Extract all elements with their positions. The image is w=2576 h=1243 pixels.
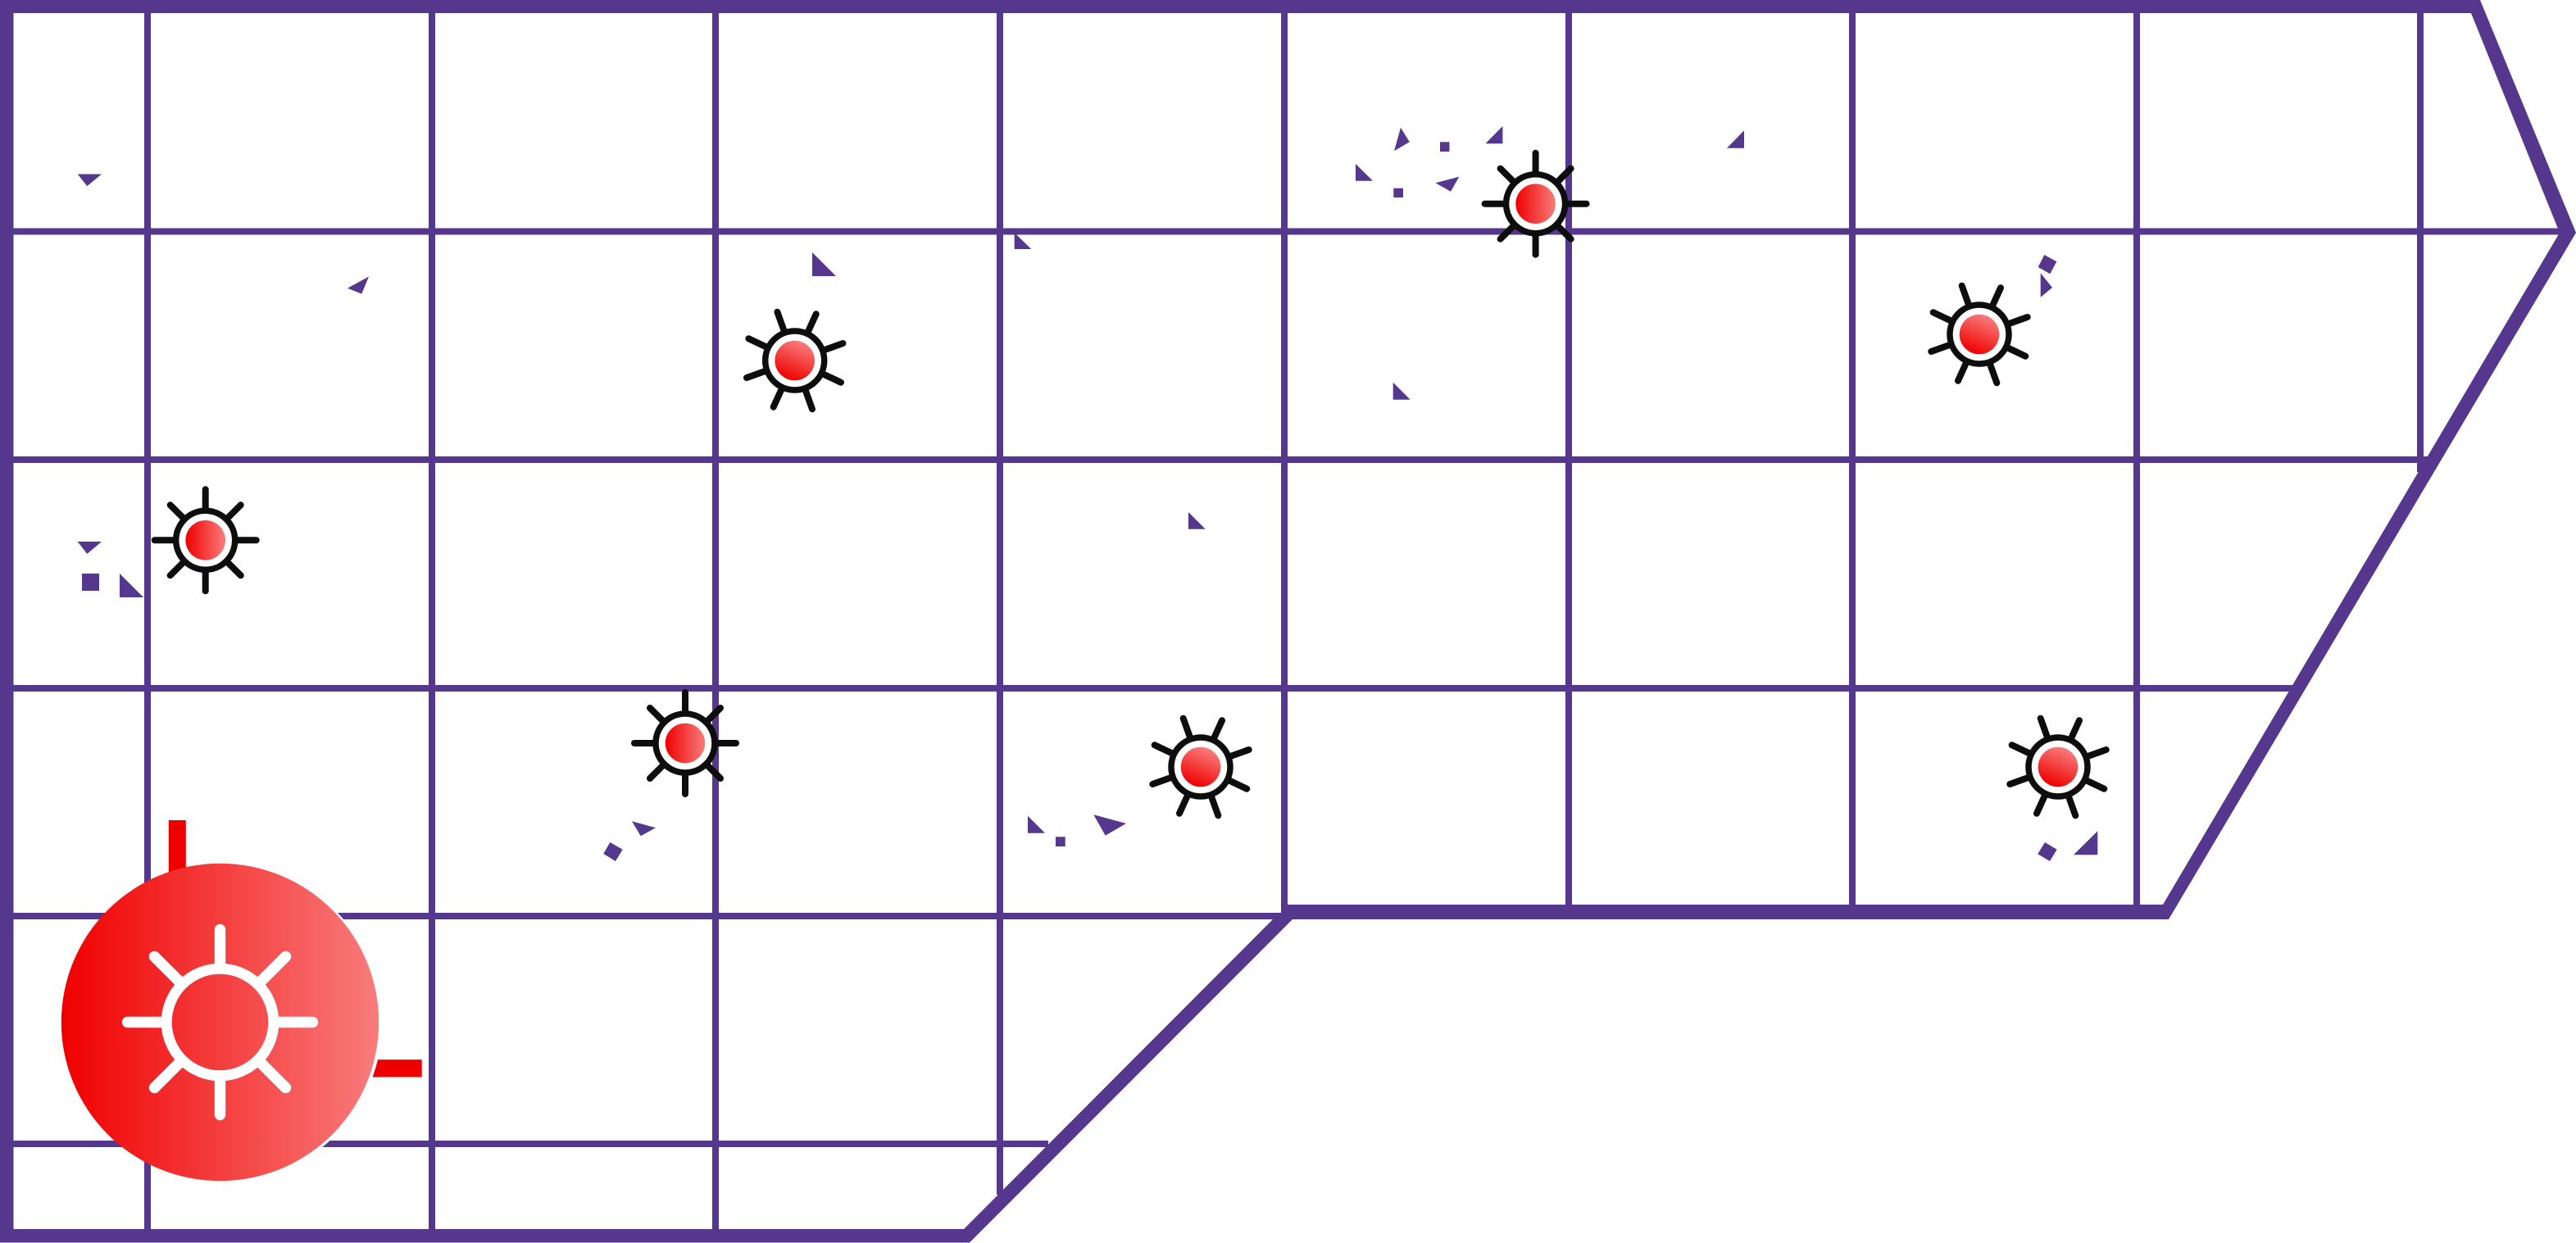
icon: small sun, lower left bbox=[634, 692, 736, 794]
icon: small sun, lower centre bbox=[1152, 719, 1249, 815]
icon: small sun, top right bbox=[1931, 286, 2028, 383]
icon: small sun, top left bbox=[747, 312, 843, 409]
icon: small sun, left bbox=[155, 489, 257, 591]
red axis ticks bbox=[169, 820, 422, 1077]
icon: small sun, lower right bbox=[2010, 719, 2106, 815]
icon: large sun badge bbox=[61, 864, 382, 1182]
scattered fragments bbox=[78, 126, 2097, 861]
icon: small sun, top centre bbox=[1485, 153, 1587, 255]
